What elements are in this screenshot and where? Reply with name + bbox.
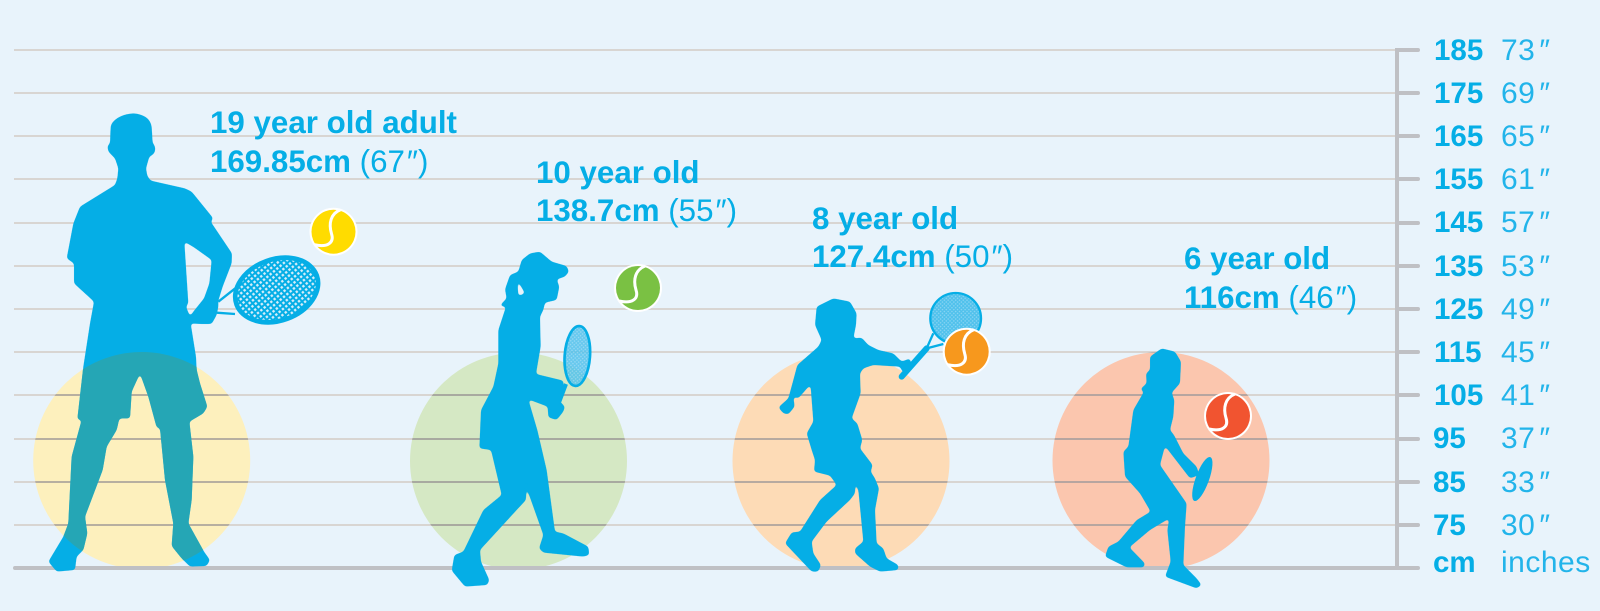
10 year old label: 138.7cm <box>536 193 668 228</box>
adult label: (67″) <box>360 144 428 179</box>
height axis <box>13 48 1420 570</box>
10 year old label: 10 year old <box>536 155 700 190</box>
centimetre scale labels: 125 <box>1434 293 1483 326</box>
6 year old label: 6 year old <box>1184 241 1330 276</box>
8 year old label: 8 year old <box>812 201 958 236</box>
boy silhouette with racket <box>778 293 981 572</box>
inches scale labels: 69″ <box>1501 77 1550 110</box>
centimetre scale labels: 95 <box>1433 422 1466 455</box>
orange ball <box>943 328 991 376</box>
centimetre scale labels: cm <box>1433 546 1476 579</box>
centimetre scale labels: 115 <box>1434 336 1482 369</box>
centimetre scale labels: 175 <box>1434 77 1483 110</box>
adult silhouette with racket <box>48 113 327 572</box>
adult circle <box>33 352 250 569</box>
inches scale labels: 41″ <box>1501 379 1550 412</box>
centimetre scale labels: 85 <box>1433 466 1466 499</box>
figure: 6 year old <box>1105 241 1357 588</box>
child silhouette with racket <box>1105 348 1217 588</box>
10 year old label: (55″) <box>668 193 737 228</box>
centimetre scale labels: 185 <box>1434 34 1483 67</box>
centimetre scale labels: 135 <box>1434 250 1483 283</box>
8 year old label: (50″) <box>944 239 1013 274</box>
8 year old label: 127.4cm <box>812 239 944 274</box>
green circle <box>410 352 627 570</box>
inches scale labels <box>1501 34 1591 579</box>
centimetre scale labels: 145 <box>1434 206 1483 239</box>
inches scale labels: 57″ <box>1501 206 1550 239</box>
6 year old label: 116cm <box>1184 280 1288 315</box>
figure: 8 year old <box>778 201 1013 572</box>
6 year old label: (46″) <box>1288 280 1357 315</box>
inches scale labels: 49″ <box>1501 293 1550 326</box>
centimetre scale labels: 105 <box>1434 379 1483 412</box>
inches scale labels: 45″ <box>1501 336 1550 369</box>
girl silhouette with racket <box>452 252 592 587</box>
centimetre scale labels: 165 <box>1434 120 1483 153</box>
red circle <box>1052 352 1270 569</box>
centimetre scale labels <box>1433 34 1483 579</box>
orange circle <box>732 352 950 570</box>
inches scale labels: inches <box>1501 546 1591 579</box>
adult label: 169.85cm <box>210 144 360 179</box>
inches scale labels: 37″ <box>1501 422 1550 455</box>
inches scale labels: 53″ <box>1501 250 1550 283</box>
inches scale labels: 65″ <box>1501 120 1550 153</box>
inches scale labels: 61″ <box>1501 163 1550 196</box>
red ball <box>1204 392 1252 440</box>
yellow ball <box>310 208 358 256</box>
figure: 10 year old <box>452 155 737 587</box>
inches scale labels: 73″ <box>1501 34 1550 67</box>
inches scale labels: 33″ <box>1501 466 1550 499</box>
green ball <box>614 264 662 312</box>
adult label: 19 year old adult <box>210 105 457 140</box>
centimetre scale labels: 155 <box>1434 163 1483 196</box>
inches scale labels: 30″ <box>1501 509 1550 542</box>
centimetre scale labels: 75 <box>1433 509 1466 542</box>
figure: 19 year old adult <box>48 105 458 572</box>
